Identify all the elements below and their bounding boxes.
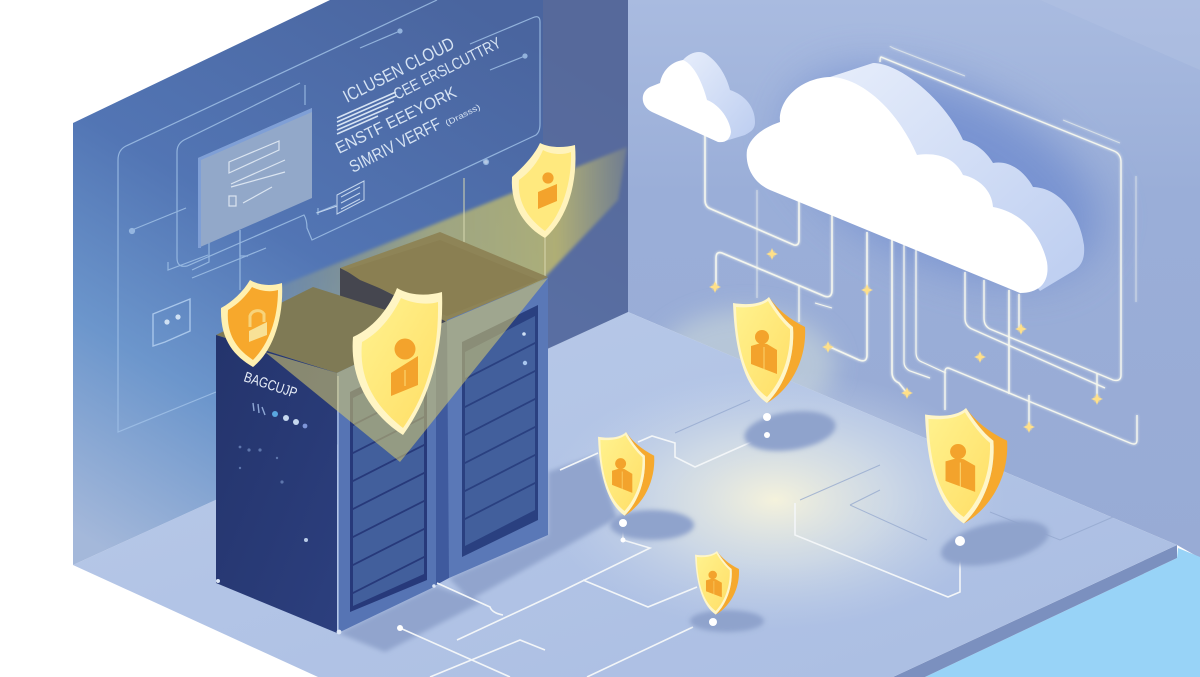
- text: small note: (Drasss): [444, 102, 482, 128]
- status lights: [253, 403, 307, 428]
- panel: right wall: [628, 0, 1200, 558]
- wall heading text: [333, 33, 504, 177]
- small diagram icon on wall: [317, 181, 364, 214]
- screen panel on wall: [198, 108, 312, 248]
- yellow beam on wall: [262, 147, 627, 462]
- shield: large floor shield: [925, 408, 1007, 524]
- floor guide outlines: [675, 400, 1113, 540]
- left wall circuit lines: [118, 0, 540, 432]
- icon: sparks on lines: [709, 248, 1103, 433]
- text: line 3: ENSTF EEEYORK: [333, 84, 459, 158]
- shield pins: [397, 413, 965, 631]
- text: line 2: CEE ERSLCUTTRY: [391, 35, 504, 104]
- shield shadows: [610, 406, 1053, 632]
- shield: middle floor shield: [598, 432, 654, 516]
- server label: BAGCUJP: [242, 370, 299, 402]
- shield: small floor shield: [695, 551, 739, 615]
- text: line 4: SIMRIV VERFF: [346, 114, 444, 177]
- server: backup rack: [216, 287, 436, 634]
- server: rear rack: [340, 232, 548, 585]
- shield: upper person shield: [512, 143, 576, 238]
- shield: front large person shield: [353, 288, 442, 435]
- shield: floor shield right wall: [733, 297, 805, 403]
- floor circuit lines: [400, 417, 960, 677]
- panel: left wall: [73, 0, 628, 565]
- icon: small cloud: [643, 52, 755, 142]
- vertical line in beam: [464, 178, 545, 300]
- panel: floor: [73, 312, 1200, 677]
- text: line 1: ICLUSEN CLOUD: [340, 33, 458, 107]
- icon: large cloud: [747, 63, 1084, 293]
- faint indicator dots: [239, 446, 284, 484]
- floor shadow of servers: [338, 455, 617, 652]
- chat icon on wall: [153, 299, 190, 346]
- text striped lines: [337, 92, 396, 134]
- yellow beam over rack faces: [265, 278, 548, 462]
- shield: lock shield on server: [221, 280, 282, 367]
- clouds network lines: [705, 47, 1137, 444]
